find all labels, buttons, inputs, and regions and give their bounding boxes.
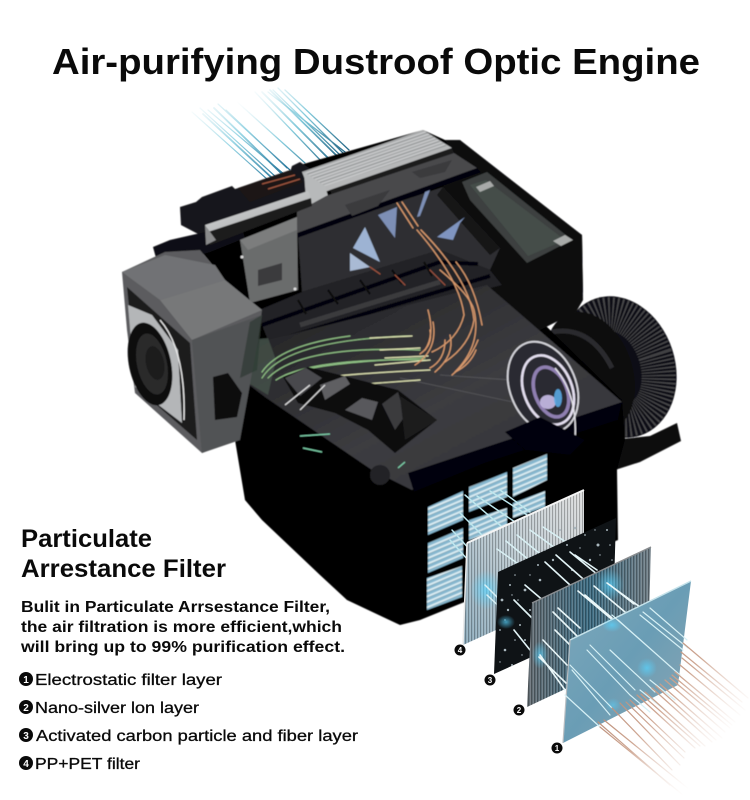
filter layer list: 2 [23, 703, 29, 714]
filter layer list: 1 [23, 675, 29, 686]
beams behind filter 3 [485, 527, 575, 615]
rear filter grille [427, 454, 547, 610]
ribbed black section [252, 250, 502, 345]
fan compartment [298, 187, 500, 292]
dark edge [443, 140, 583, 335]
filter layer list: Activated carbon particle and fiber layer [36, 728, 359, 745]
projection lens glass [495, 331, 591, 455]
speaker housing [121, 250, 262, 453]
beams behind filter 1 [539, 583, 640, 690]
description paragraph: will bring up to 99% purification effect. [20, 639, 345, 656]
dark knob [283, 367, 437, 468]
beams behind filter 4 [450, 490, 535, 560]
filter layer list [19, 672, 359, 773]
black bar under the fins [293, 168, 481, 238]
beams behind filter 2 [514, 552, 598, 650]
copper exhaust streams [598, 643, 748, 795]
internal airflow curves [262, 202, 482, 384]
layer number badges on diagram: 2 [517, 706, 522, 715]
filter layer list: 4 [23, 759, 29, 770]
filter layer 2: nano-silver ion [527, 547, 651, 707]
circuit card panel [240, 217, 298, 303]
title: Air-purifying Dustroof Optic Engine [52, 41, 700, 82]
filter layer 4: PP+PET [463, 490, 584, 645]
projector engine [121, 130, 694, 625]
translucent top plate [240, 285, 622, 492]
right side mount [612, 423, 681, 470]
layer number badges on diagram: 1 [555, 744, 560, 753]
filter layer 1: electrostatic [563, 581, 691, 743]
filter layer list: Electrostatic filter layer [35, 672, 223, 689]
section heading: Particulate [21, 525, 152, 553]
base silhouette [200, 130, 625, 625]
rear black bracket [153, 162, 312, 262]
filter layer 3: activated carbon [494, 518, 616, 674]
layer number badges on diagram: 3 [488, 676, 493, 685]
description paragraph [20, 599, 345, 656]
speaker frame [127, 287, 197, 440]
silver rail [205, 191, 312, 245]
description paragraph: Bulit in Particulate Arrsestance Filter, [21, 599, 330, 616]
layer number badges on diagram [454, 644, 562, 754]
filter layer list: PP+PET filter [35, 756, 141, 773]
heat sink fins [297, 130, 477, 233]
description paragraph: the air filtration is more efficient,which [21, 619, 342, 636]
filter layer list: Nano-silver lon layer [35, 700, 200, 717]
beams through filter 1 [565, 608, 688, 727]
airflow streams entering the top of the engine [192, 88, 349, 180]
filter layer list: 3 [23, 731, 29, 742]
layer number badges on diagram: 4 [458, 646, 463, 655]
upper housing [293, 140, 583, 335]
lens focus ring [529, 281, 694, 453]
section heading: Arrestance Filter [21, 555, 226, 583]
section heading [21, 525, 226, 583]
circuit board window [462, 172, 572, 263]
